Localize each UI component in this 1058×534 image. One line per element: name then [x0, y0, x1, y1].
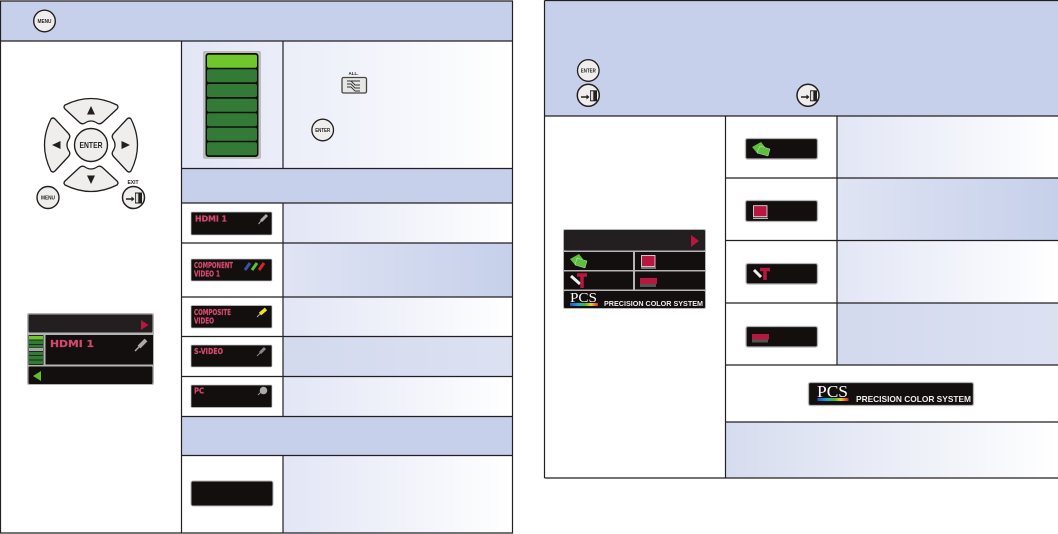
icon: header exit button — [577, 84, 599, 106]
icon: header enter button: ENTER — [581, 68, 596, 74]
setup tile — [564, 272, 633, 290]
pcs tile: PCS — [570, 291, 597, 306]
lower row description — [283, 456, 512, 533]
thumbnail: s-video: S-VIDEO — [194, 347, 223, 356]
thumbnail: hdmi — [191, 212, 272, 235]
top bar with red arrow — [564, 230, 705, 250]
thumbnail: blank button — [191, 481, 273, 506]
thumbnail: hdmi: HDMI 1 — [195, 214, 227, 224]
green input bars — [203, 51, 261, 159]
icon: header enter button — [578, 60, 599, 81]
pc row description — [283, 376, 512, 416]
input tile — [564, 252, 633, 270]
pcs tile — [564, 291, 705, 308]
thumbnail: s-video — [191, 345, 272, 367]
icon: all inputs button: ALL. — [348, 71, 358, 76]
left button — [44, 118, 70, 172]
right panel header — [544, 0, 1058, 116]
thumbnail: component video — [191, 259, 272, 281]
right button — [112, 118, 138, 172]
table grid lines — [0, 1, 512, 533]
green input list — [28, 335, 44, 365]
component row description — [283, 243, 512, 297]
down button — [64, 166, 118, 192]
thumbnail: composite video — [191, 306, 272, 328]
hdmi row description — [283, 203, 512, 243]
right panel — [544, 0, 1058, 478]
pcs logo bar: PRECISION COLOR SYSTEM — [856, 394, 971, 404]
icon: enter button: ENTER — [315, 128, 330, 134]
description row 4 — [837, 303, 1058, 365]
thumbnail: setup — [746, 264, 818, 284]
thumbnail: pc: PC — [194, 386, 204, 396]
pcs logo bar: PCS — [817, 382, 848, 401]
icon: all inputs button — [342, 71, 366, 93]
input section band — [182, 168, 512, 203]
on-screen main menu preview — [563, 229, 706, 309]
on-screen input menu preview — [27, 313, 154, 385]
icon: menu button: MENU — [38, 19, 52, 25]
right grid lines — [544, 0, 1058, 478]
left panel — [0, 1, 512, 533]
input selection row background — [182, 41, 512, 168]
icon: header exit button second — [797, 84, 819, 106]
pcs tile: PRECISION COLOR SYSTEM — [604, 301, 703, 308]
icon: enter button — [312, 119, 334, 141]
description row 2 — [837, 178, 1058, 240]
pcs logo bar — [808, 382, 974, 406]
picture tile — [635, 252, 705, 270]
thumbnail: memory — [746, 326, 818, 347]
thumbnail: picture — [746, 200, 818, 222]
thumbnail: composite video: COMPOSITE — [194, 308, 231, 317]
description row 1 — [837, 116, 1058, 178]
memory tile — [635, 272, 705, 290]
enter button: ENTER — [80, 140, 102, 150]
description row 3 — [837, 240, 1058, 303]
exit button: EXIT — [127, 180, 139, 186]
thumbnail: composite video: VIDEO — [194, 316, 214, 326]
blue section band lower — [182, 416, 512, 456]
composite row description — [283, 297, 512, 336]
thumbnail: component video: VIDEO 1 — [194, 270, 220, 278]
thumbnail: component video: COMPONENT — [194, 261, 233, 270]
remote control pad — [37, 98, 144, 208]
left panel header — [0, 1, 512, 41]
s-video row description — [283, 336, 512, 376]
bottom bar with green arrow — [28, 366, 152, 384]
up button — [64, 98, 118, 124]
description row pcs — [726, 422, 1058, 478]
menu button: MENU — [41, 196, 55, 202]
top bar with red arrow — [28, 314, 152, 332]
thumbnail: input — [746, 138, 818, 159]
icon: menu button — [34, 10, 55, 32]
selected input: HDMI 1 — [50, 339, 94, 350]
thumbnail: pc — [191, 385, 272, 408]
